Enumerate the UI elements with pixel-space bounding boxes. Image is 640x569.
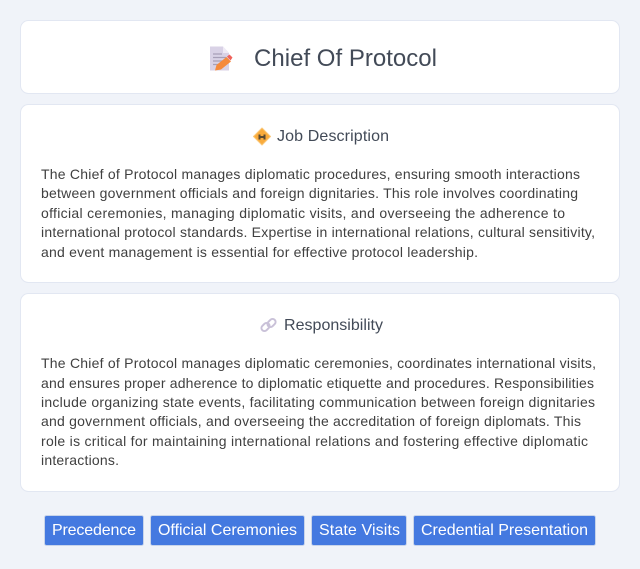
tag: state visits: State Visits (319, 522, 400, 539)
responsibility text: and ensures proper adherence to diplomatic etiquette and procedures. Responsibilities (41, 375, 594, 391)
panel: responsibility (20, 294, 620, 492)
job description text: international protocol standards. Expertise in international relations, cultural sensitivity, (41, 224, 595, 240)
tag: credential presentation (414, 516, 596, 546)
job description text (41, 166, 595, 260)
tag: official ceremonies (150, 516, 304, 546)
job description text: between government officials and foreign dignitaries. This role involves coordinating (41, 185, 578, 201)
tag row (44, 516, 596, 546)
icon: chain link (260, 318, 277, 332)
job description text: and event management is essential for effective protocol leadership. (41, 244, 478, 260)
tag: state visits (312, 516, 406, 546)
tag: official ceremonies: Official Ceremonies (158, 522, 297, 539)
title text: Chief Of Protocol (254, 45, 437, 72)
job description text: official ceremonies, managing diplomatic visits, and overseeing the adherence to (41, 205, 565, 221)
tag: precedence (44, 516, 144, 546)
responsibility text: include organizing state events, facilitating communication between foreign dignitaries (41, 394, 595, 410)
job description text: The Chief of Protocol manages diplomatic procedures, ensuring smooth interactions (41, 166, 580, 182)
responsibility text: role is critical for maintaining international relations and fostering effective diplomatic (41, 433, 588, 449)
heading: job description: Job Description (277, 128, 389, 145)
panel: title (20, 20, 620, 94)
responsibility text (41, 355, 596, 468)
responsibility text: and government officials, and overseeing the accreditation of foreign diplomats. This (41, 413, 581, 429)
responsibility text: The Chief of Protocol manages diplomatic ceremonies, coordinates international visits, (41, 355, 596, 371)
heading: responsibility: Responsibility (284, 317, 383, 334)
tag: credential presentation: Credential Presentation (421, 522, 588, 539)
responsibility text: interactions. (41, 452, 119, 468)
tag: precedence: Precedence (52, 522, 136, 539)
panel: job description (20, 104, 620, 282)
icon: road sign diamond (254, 128, 270, 145)
icon: document with pencil (210, 46, 232, 70)
